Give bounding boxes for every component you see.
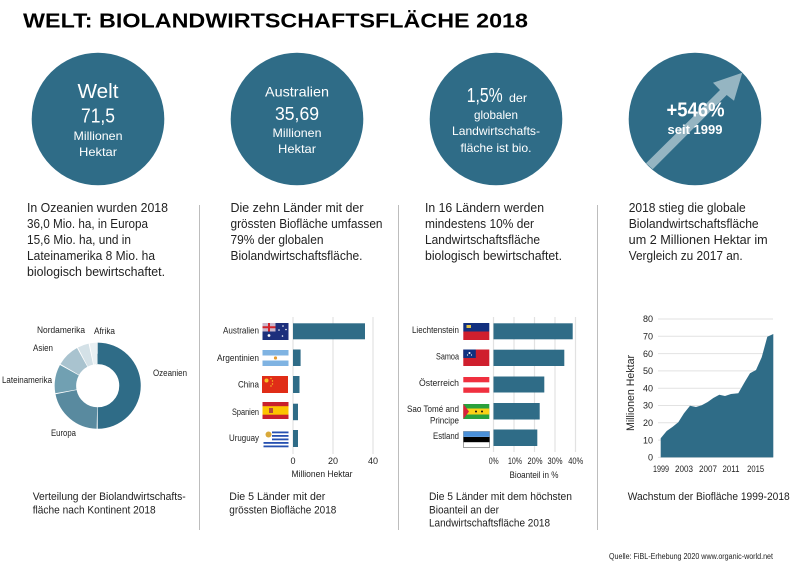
icon: flag Spain: [262, 402, 288, 419]
stat circle: Welt: Welt: [78, 81, 119, 103]
bar chart: largest organic area: Uruguay: [229, 433, 259, 443]
bar chart: highest organic share: 10%: [508, 456, 522, 466]
source note: Quelle: FiBL-Erhebung 2020 www.organic-world.net: [609, 552, 774, 561]
text block: zehn Länder: 79% der globalen: [230, 233, 324, 247]
text block: zehn Länder: Die zehn Länder mit der: [230, 201, 364, 215]
bar chart: highest organic share: Samoa: [436, 352, 459, 362]
area chart: growth 1999-2017: 50: [643, 366, 653, 376]
caption: highest share: Die 5 Länder mit dem höchsten: [429, 491, 572, 503]
area chart: growth 1999-2017: 20: [643, 418, 653, 428]
text block: 2018 Anstieg: Vergleich zu 2017 an.: [629, 249, 743, 263]
text block: 16 Länder: [425, 201, 562, 263]
stat circle: bio share: fläche ist bio.: [460, 141, 532, 155]
text block: Ozeanien: 15,6 Mio. ha, und in: [27, 233, 131, 247]
area chart: growth 1999-2017: [625, 314, 773, 474]
bar chart: highest organic share: 40%: [568, 456, 583, 466]
caption: growth: Wachstum der Biofläche 1999-2018: [628, 491, 790, 503]
stat circle: bio share: Landwirtschafts-: [452, 124, 540, 138]
stat circle: growth with arrow: seit 1999: [668, 123, 723, 137]
caption: donut: [33, 491, 186, 516]
stat circle: Welt: Millionen: [74, 129, 122, 143]
bar chart: largest organic area: 0: [290, 456, 296, 466]
donut chart: continents: [2, 325, 187, 438]
bar chart: largest organic area: 40: [368, 456, 378, 466]
stat circle: Australien: 35,69: [275, 104, 319, 124]
area chart: growth 1999-2017: 70: [643, 332, 653, 342]
donut chart: continents: Ozeanien: [153, 368, 187, 378]
bar chart: highest organic share: 30%: [548, 456, 562, 466]
bar chart: largest organic area: China: [238, 380, 259, 390]
title: WELT: BIOLANDWIRTSCHAFTSFLÄCHE 2018: [23, 10, 528, 32]
stat circle: Welt: Hektar: [79, 145, 117, 159]
donut chart: continents: Nordamerika: [37, 325, 85, 335]
caption: largest area: grössten Biofläche 2018: [229, 504, 336, 516]
bar chart: largest organic area: 20: [328, 456, 338, 466]
area chart: growth 1999-2017: 1999: [653, 464, 669, 474]
stat circle: bio share: der: [509, 91, 527, 105]
stat circle: Australien: Australien: [265, 84, 329, 100]
bar chart: highest organic share: 20%: [528, 456, 542, 466]
donut chart: continents: Afrika: [94, 326, 115, 336]
bar chart: highest organic share: Liechtenstein: [412, 325, 459, 335]
area chart: growth 1999-2017: 60: [643, 349, 653, 359]
area chart: growth 1999-2017: 30: [643, 401, 653, 411]
caption: largest area: [229, 491, 336, 516]
area chart: growth 1999-2017: 80: [643, 314, 653, 324]
text block: Ozeanien: 36,0 Mio. ha, in Europa: [27, 217, 148, 231]
stat circle: Australien: Hektar: [278, 142, 316, 156]
area chart: growth 1999-2017: 0: [648, 453, 653, 463]
stat circle: growth with arrow: [629, 53, 761, 185]
bar chart: largest organic area: Spanien: [232, 407, 259, 417]
stat circle: bio share: globalen: [474, 108, 518, 122]
text block: 2018 Anstieg: [629, 201, 768, 263]
text block: 2018 Anstieg: um 2 Millionen Hektar im: [629, 233, 768, 247]
icon: flag Liechtenstein: [463, 323, 489, 340]
donut chart: continents: Europa: [51, 428, 76, 438]
area chart: growth 1999-2017: 10: [643, 435, 653, 445]
bar chart: highest organic share: Principe: [430, 416, 459, 426]
text block: 2018 Anstieg: 2018 stieg die globale: [629, 201, 746, 215]
caption: donut: Verteilung der Biolandwirtschafts-: [33, 491, 186, 503]
area chart: growth 1999-2017: 2003: [675, 464, 693, 474]
icon: flag China: [262, 376, 288, 393]
text block: 2018 Anstieg: Biolandwirtschaftsfläche: [629, 217, 759, 231]
stat circle: Australien: [231, 53, 363, 185]
text block: 16 Länder: mindestens 10% der: [425, 217, 534, 231]
donut chart: continents: Asien: [33, 343, 53, 353]
icon: flag Uruguay: [264, 432, 288, 447]
stat circle: bio share: [430, 53, 562, 185]
text block: Ozeanien: Lateinamerika 8 Mio. ha: [27, 249, 155, 263]
area chart: growth 1999-2017: Millionen Hektar: [625, 355, 637, 431]
area chart: growth 1999-2017: 2015: [747, 464, 764, 474]
bar chart: largest organic area: Millionen Hektar: [292, 469, 352, 479]
stat circle: Australien: Millionen: [272, 126, 322, 140]
icon: flag Estonia: [464, 432, 490, 448]
bar chart: largest organic area: Argentinien: [217, 353, 259, 363]
area chart: growth 1999-2017: 2011: [722, 464, 740, 474]
bar chart: highest organic share: Estland: [433, 431, 459, 441]
bar chart: highest organic share: Bioanteil in %: [510, 470, 558, 480]
bar chart: largest organic area: [217, 317, 378, 479]
text block: 16 Länder: In 16 Ländern werden: [425, 201, 544, 215]
stat circle: bio share: 1,5%: [467, 85, 503, 107]
icon: flag Argentina: [262, 350, 288, 366]
stat circle: growth with arrow: +546%: [666, 100, 725, 122]
bar chart: highest organic share: [407, 317, 583, 480]
bar chart: highest organic share: Österreich: [419, 378, 459, 388]
caption: highest share: Bioanteil an der: [429, 504, 499, 516]
icon: flag Australia: [262, 323, 288, 340]
caption: highest share: [429, 491, 572, 530]
text block: Ozeanien: In Ozeanien wurden 2018: [27, 201, 168, 215]
bar chart: largest organic area: Australien: [223, 326, 259, 336]
icon: flag Samoa: [463, 350, 489, 366]
text block: Ozeanien: biologisch bewirtschaftet.: [27, 265, 165, 279]
caption: largest area: Die 5 Länder mit der: [229, 491, 326, 503]
caption: donut: fläche nach Kontinent 2018: [33, 504, 156, 516]
icon: flag Austria: [463, 377, 489, 393]
text block: zehn Länder: grössten Biofläche umfassen: [230, 217, 383, 231]
text block: zehn Länder: [230, 201, 383, 263]
area chart: growth 1999-2017: 40: [643, 383, 653, 393]
bar chart: highest organic share: 0%: [489, 456, 499, 466]
icon: rising arrow: [646, 73, 742, 169]
bar chart: highest organic share: Sao Tomé and: [407, 404, 459, 414]
stat circle: Welt: 71,5: [81, 106, 115, 128]
icon: flag Sao Tome and Principe: [463, 404, 489, 419]
text block: zehn Länder: Biolandwirtschaftsfläche.: [230, 249, 362, 263]
area chart: growth 1999-2017: 2007: [699, 464, 717, 474]
text block: Ozeanien: [27, 201, 168, 279]
stat circle: Welt: [32, 53, 164, 185]
text block: 16 Länder: Landwirtschaftsfläche: [425, 233, 540, 247]
text block: 16 Länder: biologisch bewirtschaftet.: [425, 249, 562, 263]
caption: highest share: Landwirtschaftsfläche 2018: [429, 518, 550, 530]
donut chart: continents: Lateinamerika: [2, 375, 52, 385]
